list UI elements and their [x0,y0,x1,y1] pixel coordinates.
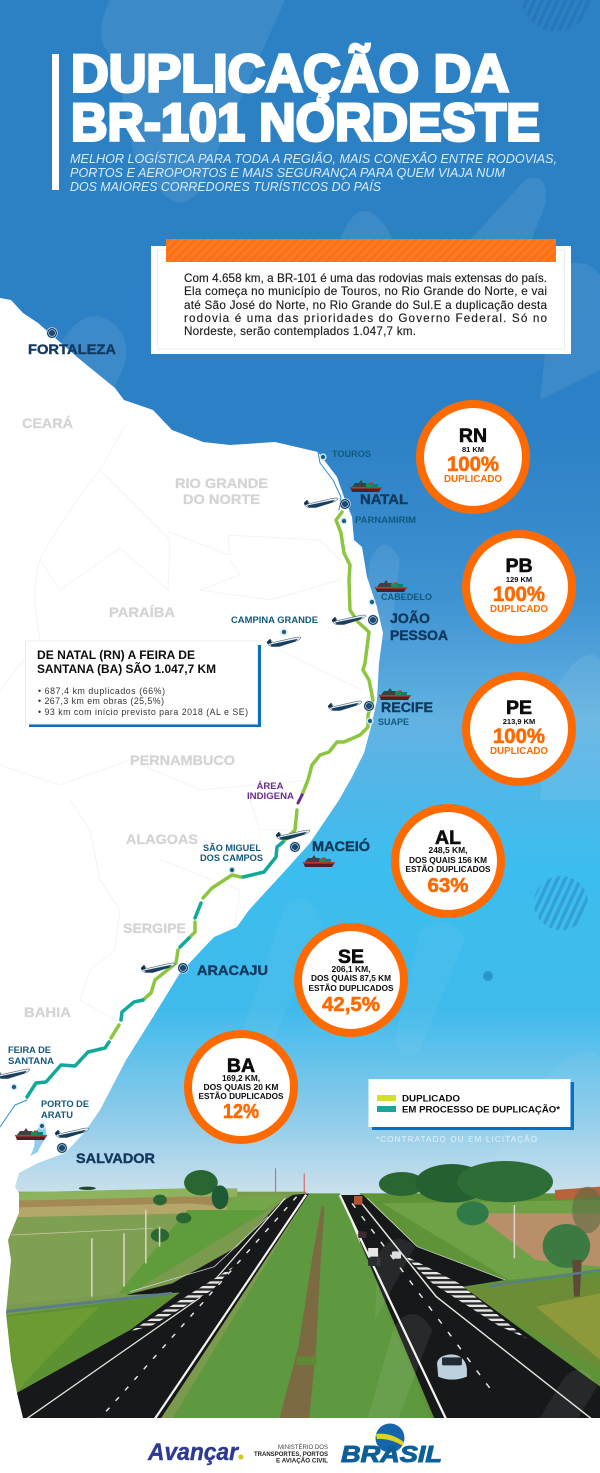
badge: PB: PB [505,555,533,577]
panel heading: DE NATAL (RN) A FEIRA DE [37,650,195,662]
photo: left fields [0,1188,306,1419]
city: Touros: TOUROS [332,449,371,459]
subtitle: PORTOS E AEROPORTOS E MAIS SEGURANÇA PARA QUEM VIAJA NUM [70,166,505,180]
city: Porto de Aratu: PORTO DE [41,1099,89,1109]
map: land mass of the Northeast [0,298,383,1418]
photo: central median [172,1193,431,1419]
badge: BA: 12% [223,1100,259,1123]
legend [368,1079,574,1130]
logo: Ministério dos Transportes: E AVIAÇÃO CIVIL [276,1456,328,1464]
city: Fortaleza: FORTALEZA [28,341,116,357]
city: Aracaju [141,962,268,978]
panel bullet list: • 267,3 km em obras (25,5%) [38,696,164,706]
label: indigenous area: ÁREA [257,781,284,792]
decorative hatched circles [483,0,592,981]
city: Parnamirim: PARNAMIRIM [355,515,416,525]
map: Porto de Aratu bay [30,1125,46,1156]
legend item: under duplication: EM PROCESSO DE DUPLICAÇÃO* [402,1104,561,1114]
badge: RN: 81 KM [462,445,484,454]
badge: PE: 213,9 KM [503,717,535,726]
city: João Pessoa: PESSOA [390,627,448,643]
panel bullet list [38,686,248,717]
badge: BA: ESTÃO DUPLICADOS [198,1092,284,1101]
title accent bar [52,54,59,190]
title [71,44,540,152]
panel bullet list: • 687,4 km duplicados (66%) [38,686,165,696]
city: Salvador [55,1128,155,1166]
photo: translucent overlay capsules [367,1239,597,1419]
introduction text: rodovia é uma das prioridades do Governo Federal. Só no [184,312,547,325]
introduction text: até São José do Norte, no Rio Grande do Sul.E a duplicação desta [184,299,547,312]
label: indigenous area: INDIGENA [247,791,294,802]
badge: RN: RN [459,425,487,447]
legend footnote: *CONTRATADO OU EM LICITAÇÃO [376,1135,537,1144]
badge: PE: DUPLICADO [490,745,548,757]
logo: Brasil: BRASIL [341,1441,442,1467]
city: Feira de Santana: SANTANA [8,1056,55,1066]
photo: poles and guard rails [6,1168,600,1312]
badge: SE: SE [338,946,364,968]
city: Suape: SUAPE [378,717,409,727]
subtitle: DOS MAIORES CORREDORES TURÍSTICOS DO PAÍS [70,179,382,194]
city: Feira de Santana: FEIRA DE [8,1045,51,1055]
title: BR-101 NORDESTE [71,94,540,152]
state names on map: RIO GRANDE [175,475,268,491]
badge: RN: 100% [447,453,499,476]
state names on map: BAHIA [24,1004,71,1020]
city: Campina Grande: CAMPINA GRANDE [231,615,318,625]
legend item: duplicated: DUPLICADO [402,1094,460,1104]
badge: PE: 100% [493,725,545,748]
state names on map [22,415,268,1020]
route: BR-101 line [0,452,373,1127]
city: Maceió: MACEIÓ [312,837,370,854]
route: duplicated segments [111,512,373,1038]
badge: RN [420,404,526,510]
route: existing road, thin blue [318,452,341,510]
introduction text: Nordeste, serão contemplados 1.047,7 km. [184,325,416,338]
badge: PB [466,534,572,640]
panel heading [37,650,216,676]
footer logos [147,1424,442,1467]
badge: BA: DOS QUAIS 20 KM [204,1083,278,1092]
city: Aracaju: ARACAJU [197,962,268,978]
state names on map: DO NORTE [183,491,260,507]
badge: AL [395,808,501,914]
badge: RN: DUPLICADO [444,473,502,485]
city: Fortaleza [28,327,116,357]
road photograph [0,1161,600,1419]
badge: PB: 129 KM [506,575,532,584]
logo: Ministério dos Transportes: TRANSPORTES, PORTOS [254,1451,328,1458]
badge: AL: ESTÃO DUPLICADOS [406,865,490,874]
logo: Avançar: Avançar [147,1439,240,1466]
introduction text: Com 4.658 km, a BR-101 é uma das rodovias mais extensas do país. [184,272,547,285]
city: João Pessoa: JOÃO [390,609,430,626]
badge: PE [466,676,572,782]
title: DUPLICAÇÃO DA [71,44,509,104]
badge: BA [188,1034,294,1140]
subtitle [70,151,557,194]
route: indigenous area segment [298,795,302,803]
route: segments under duplication [27,842,283,1097]
logo: Ministério dos Transportes: MINISTÉRIO DOS [278,1442,328,1451]
badge: AL: DOS QUAIS 156 KM [409,856,487,865]
city: Cabedelo [368,580,432,606]
badge: PB: DUPLICADO [490,603,548,615]
title block [52,44,557,194]
badge: SE: DOS QUAIS 87,5 KM [311,974,391,983]
city: Feira de Santana [0,1045,55,1091]
badge: AL: 248,5 KM, [428,846,468,855]
city: Campina Grande [231,615,318,646]
city: Recife: RECIFE [381,699,433,715]
footer background [0,1418,600,1473]
city: Natal: NATAL [360,491,408,507]
badge: BA: BA [227,1055,255,1077]
city: São Miguel dos Campos: DOS CAMPOS [200,853,263,863]
logo: Ministério dos Transportes [254,1442,328,1464]
badge: SE: 206,1 KM, [332,965,370,974]
city: Porto de Aratu: ARATU [41,1110,73,1120]
logo: Brasil [341,1424,442,1467]
city: João Pessoa [332,609,448,643]
city: Cabedelo: CABEDELO [381,592,432,602]
badge: SE: 42,5% [322,993,380,1016]
city: São Miguel dos Campos: SÃO MIGUEL [203,843,261,853]
badge: SE [298,927,404,1033]
city: São Miguel dos Campos [200,843,263,874]
panel: Natal to Feira de Santana [26,641,261,727]
panel heading: SANTANA (BA) SÃO 1.047,7 KM [37,663,216,676]
city: Porto de Aratu [15,1099,89,1140]
panel: BR-101 introduction [151,239,571,354]
photo: right carriageway [340,1195,600,1419]
city: Touros [319,449,371,461]
orange header bar [166,239,556,262]
city: Salvador: SALVADOR [76,1150,155,1166]
city: Natal [304,480,408,510]
badge: PE: PE [506,697,532,719]
city: Recife [328,688,433,715]
panel bullet list: • 93 km com início previsto para 2018 (AL e SE) [38,707,248,717]
badge: AL: 63% [428,874,468,897]
photo: trees [79,1161,600,1297]
introduction text [184,272,547,338]
state names on map: CEARÁ [22,415,73,431]
badge: BA: 169,2 KM, [222,1074,260,1083]
badge: PB: 100% [493,583,545,606]
background decorative capsules [30,0,600,1190]
legend item: duplicated [377,1094,460,1104]
map: state borders [0,425,362,1020]
label: indigenous area [247,781,294,802]
photo: right fields [360,1187,600,1419]
city: Maceió [276,830,370,867]
badge: SE: ESTÃO DUPLICADOS [308,984,394,993]
badge: AL: AL [435,827,461,849]
state names on map: PERNAMBUCO [130,752,235,768]
introduction text: Ela começa no município de Touros, no Rio Grande do Norte, e vai [184,285,547,298]
photo: left carriageway [16,1193,309,1419]
route: southern thin blue segment [0,1100,27,1127]
state names on map: SERGIPE [123,920,186,936]
state names on map: PARAÍBA [109,604,175,620]
state names on map: ALAGOAS [126,831,198,847]
photo: vehicles [354,1196,467,1380]
subtitle: MELHOR LOGÍSTICA PARA TODA A REGIÃO, MAIS CONEXÃO ENTRE RODOVIAS, [70,151,557,166]
